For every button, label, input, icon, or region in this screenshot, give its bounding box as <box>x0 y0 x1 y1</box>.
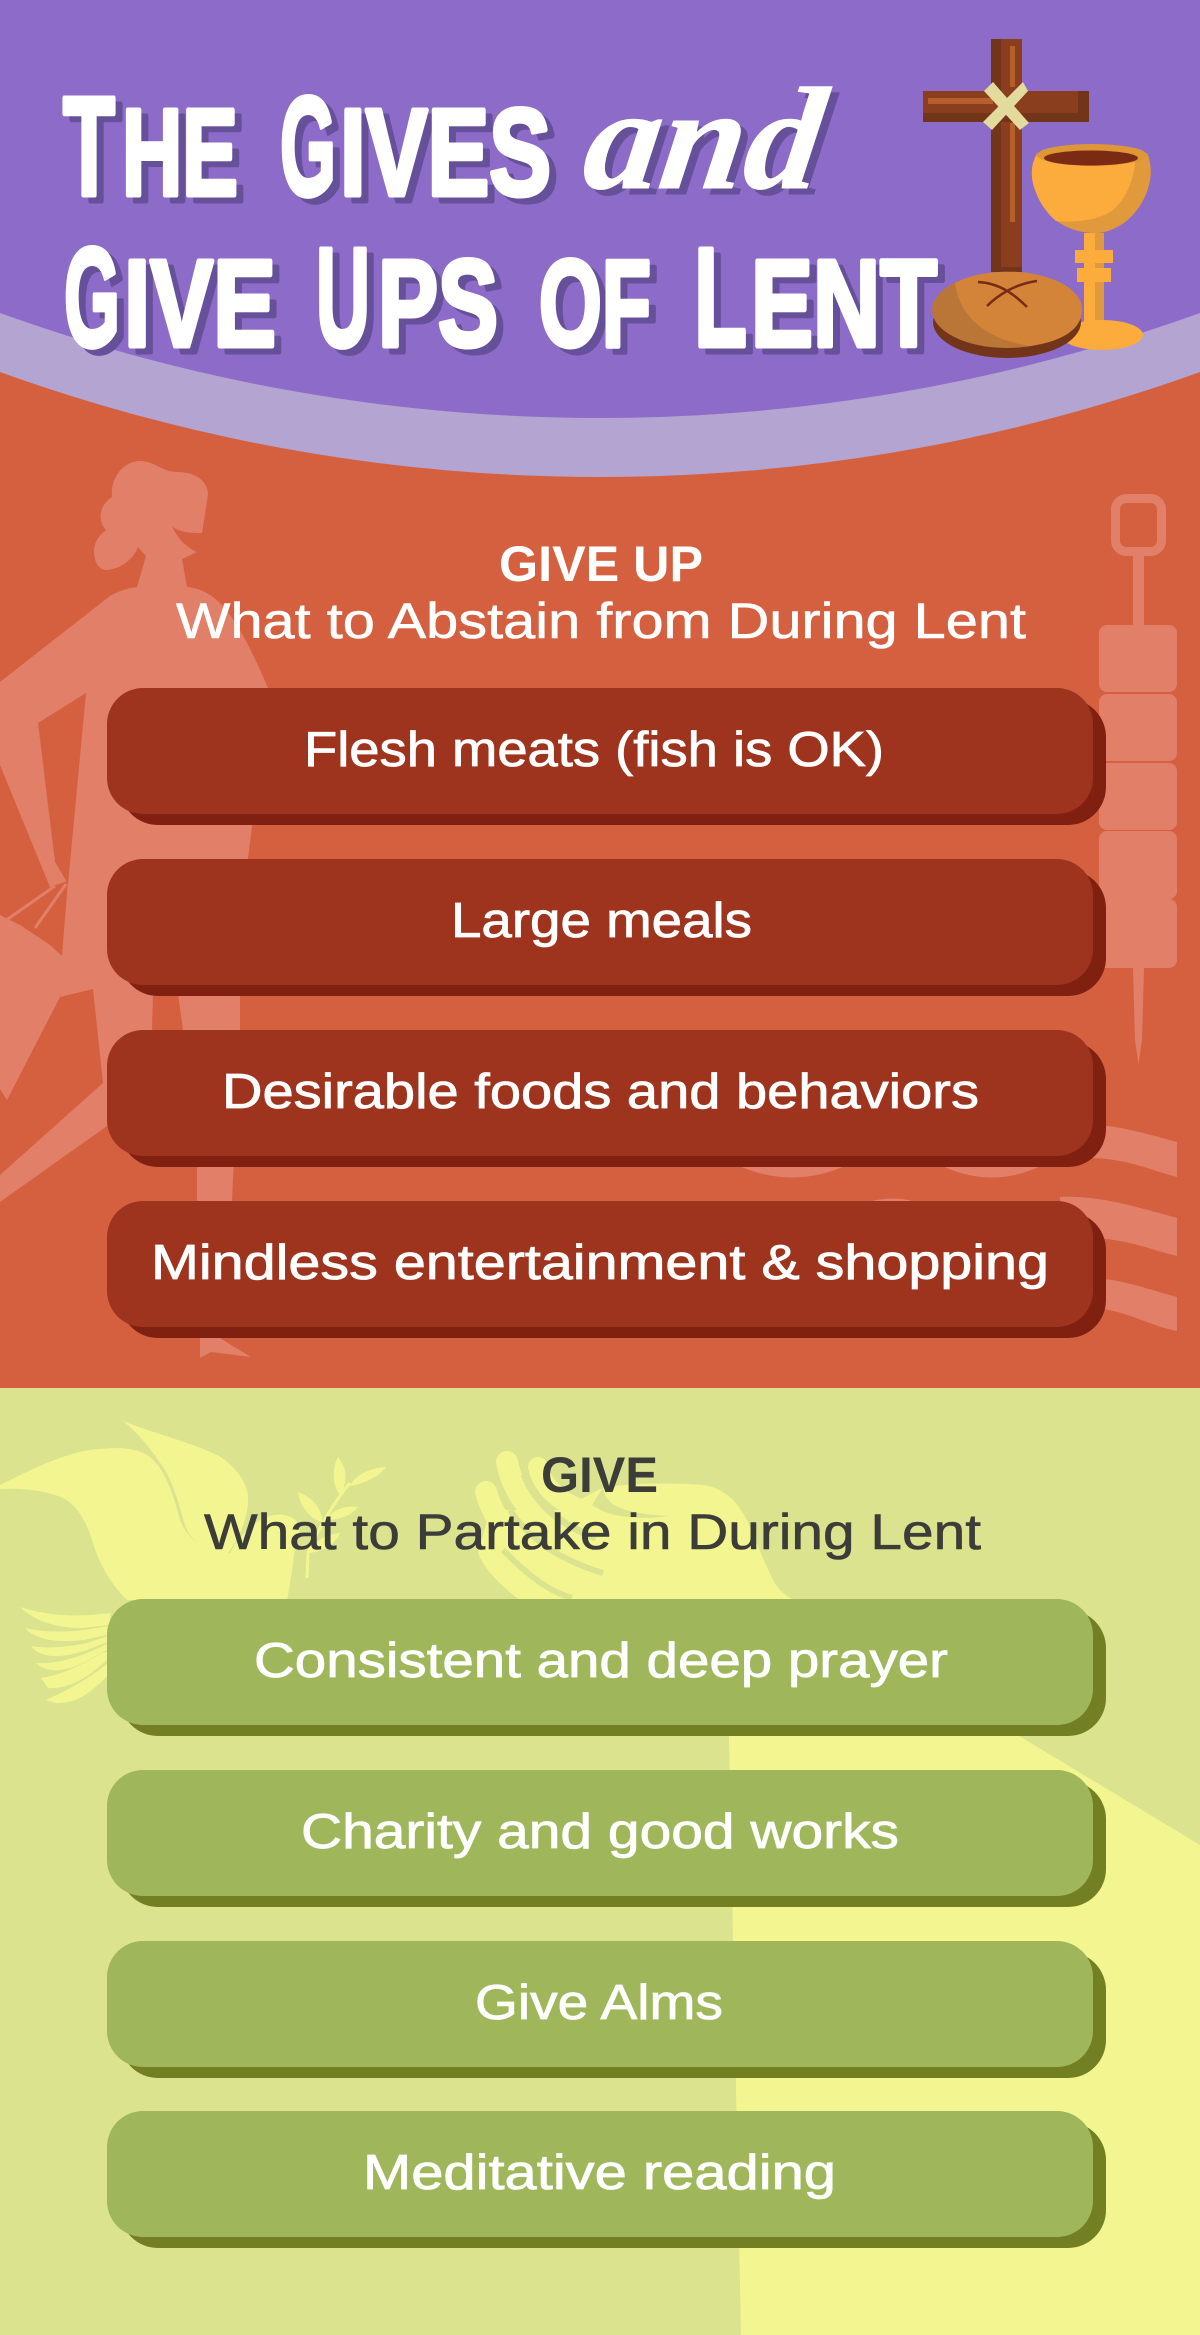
item: meditative reading <box>107 2111 1106 2248</box>
title: U <box>316 218 370 376</box>
panel: give up background <box>0 0 1200 1388</box>
item: prayer: Consistent and deep prayer <box>254 1634 948 1688</box>
silhouette: open hand <box>478 1462 794 1600</box>
title: G <box>280 67 336 225</box>
title <box>63 58 937 376</box>
item: alms: Give Alms <box>475 1976 723 2030</box>
icon: golden chalice <box>1032 144 1151 350</box>
icon: wooden cross <box>923 39 1089 272</box>
heading: give up: GIVE UP <box>499 536 703 592</box>
item: mindless entertainment <box>107 1201 1106 1338</box>
title: PS <box>378 236 498 373</box>
item: flesh meats: Flesh meats (fish is OK) <box>304 723 884 777</box>
title: ENT <box>751 236 937 373</box>
item: flesh meats <box>107 688 1106 825</box>
item: charity <box>107 1770 1106 1907</box>
title: and <box>576 58 837 220</box>
purple header <box>0 0 1200 418</box>
silhouette: dove with olive branch <box>0 1421 386 1703</box>
heading: give <box>204 1447 981 1560</box>
item: charity: Charity and good works <box>301 1805 899 1859</box>
title: L <box>694 218 747 376</box>
item: large meals: Large meals <box>451 894 752 948</box>
heading: give: GIVE <box>541 1447 658 1503</box>
item: desirable foods <box>107 1030 1106 1167</box>
heading: give up: What to Abstain from During Lent <box>176 593 1026 649</box>
light purple arc band <box>0 0 1200 477</box>
item: desirable foods: Desirable foods and behaviors <box>222 1065 979 1119</box>
icon: bread loaf <box>932 272 1082 358</box>
item: mindless entertainment: Mindless entertainment & shopping <box>151 1236 1049 1290</box>
heading: give up <box>176 536 1026 649</box>
item: alms <box>107 1941 1106 2078</box>
title: OF <box>539 236 651 373</box>
title: G <box>64 218 120 376</box>
item: large meals <box>107 859 1106 996</box>
heading: give: What to Partake in During Lent <box>204 1504 981 1560</box>
title: IVE <box>124 236 276 373</box>
item: meditative reading: Meditative reading <box>363 2146 836 2200</box>
silhouette: bacon waves <box>737 1125 1177 1331</box>
item: prayer <box>107 1599 1106 1736</box>
silhouette: food skewer <box>1099 498 1177 1064</box>
title: IVES <box>340 85 551 222</box>
title: T <box>63 67 115 225</box>
silhouette: woman shopping <box>0 461 268 1358</box>
yellow background shape <box>727 1640 1200 2335</box>
title: HE <box>122 85 238 222</box>
panel: give background <box>0 1388 1200 2335</box>
